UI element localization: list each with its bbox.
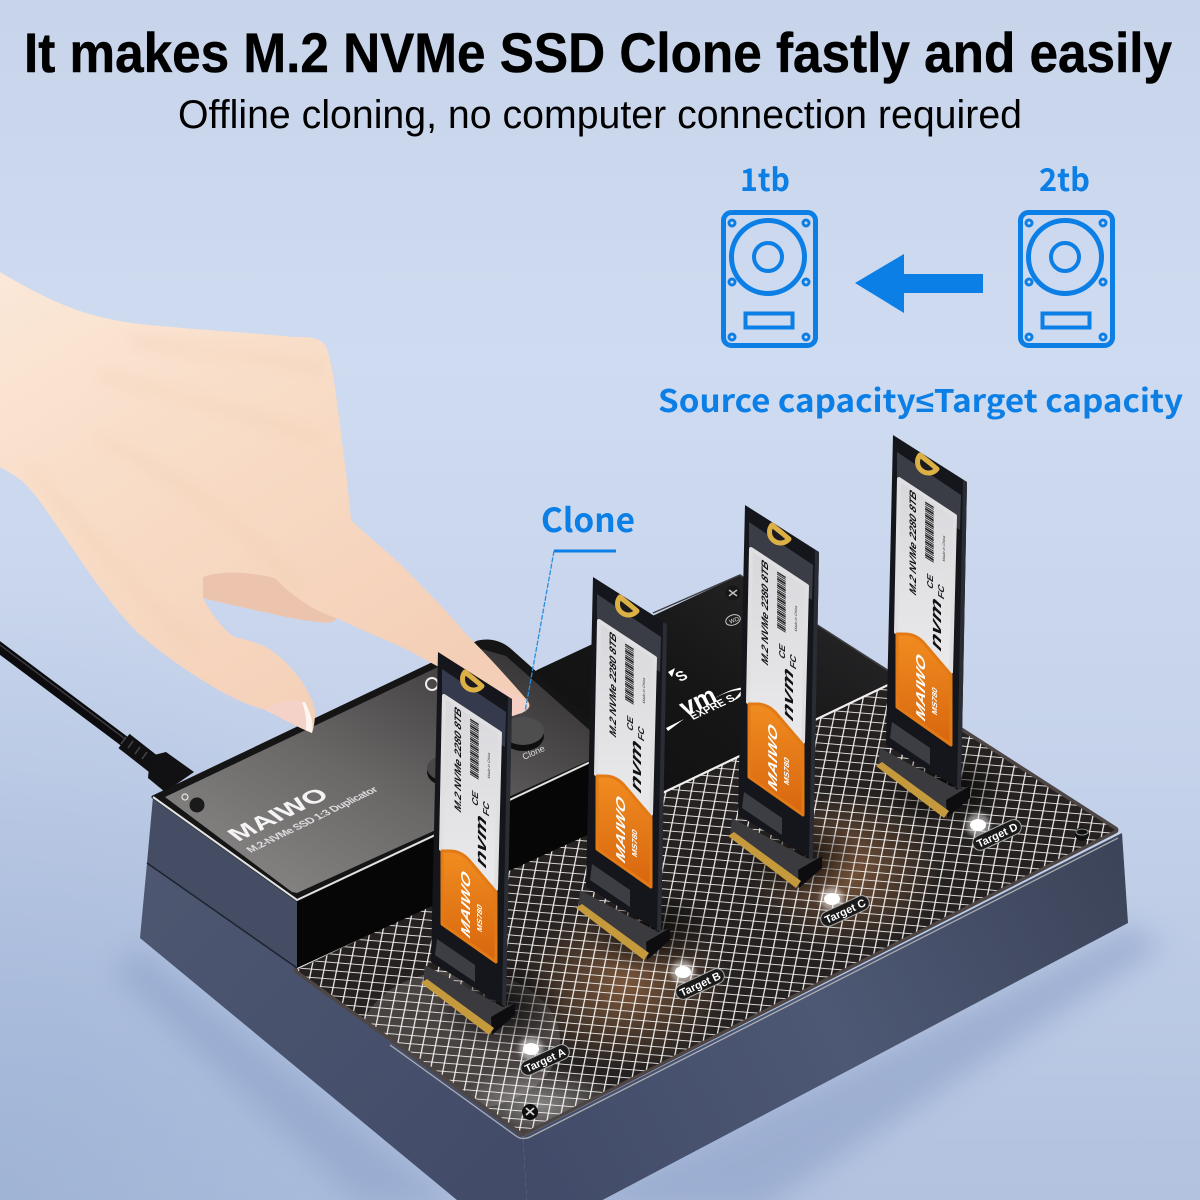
brand logo: MAIWO <box>222 784 335 846</box>
SSD card B: CE <box>626 714 636 734</box>
NVM Express logo on housing: vm <box>672 683 724 721</box>
clone label: Clone <box>541 494 635 542</box>
rear black housing <box>297 575 892 968</box>
SSD card D: M.2 NVMe 2280 8TB <box>908 488 919 598</box>
clone callout <box>525 494 635 712</box>
target B indicator: Target B <box>678 970 723 1000</box>
target C indicator <box>818 887 872 929</box>
SSD card C: nvm <box>779 664 796 724</box>
icon: source hard drive <box>1020 212 1112 346</box>
SSD card C: FC <box>789 652 799 672</box>
WD badge <box>724 613 742 627</box>
SSD card B: M.2 NVMe 2280 8TB <box>608 630 619 740</box>
housing top rim <box>153 641 620 900</box>
secondary button <box>427 755 467 786</box>
capacity diagram <box>658 155 1183 421</box>
SSD card D: CE <box>926 572 936 592</box>
clone button <box>502 717 544 751</box>
leader line <box>554 550 616 552</box>
SSD card C: CE <box>778 642 788 662</box>
NVM Express logo on housing: S <box>672 668 692 685</box>
SSD card D: FC <box>937 582 947 602</box>
SSD card C: MAIWO <box>766 721 780 794</box>
power LED <box>182 794 204 812</box>
SSD card D: MAIWO <box>914 651 928 724</box>
SSD card A <box>421 652 515 1035</box>
knuckle shading <box>30 340 325 650</box>
WD badge: WD <box>729 616 741 626</box>
model caption: M.2-NVMe SSD 1:3 Duplicator <box>244 785 382 855</box>
SSD card C: MS780 <box>782 755 791 787</box>
SSD card B: nvm <box>627 736 644 796</box>
SSD card A: nvm <box>472 811 489 871</box>
index finger nail <box>497 686 528 716</box>
curled finger underside <box>203 573 337 623</box>
target D indicator: Target D <box>975 821 1020 851</box>
SSD card C: M.2 NVMe 2280 8TB <box>760 558 771 668</box>
target drive label: 1tb <box>740 155 790 200</box>
SSD card B <box>576 577 670 960</box>
SSD card B: MAIWO <box>614 793 628 866</box>
base right face <box>523 833 1128 1200</box>
SSD card D: nvm <box>927 594 944 654</box>
screw: rear <box>726 586 740 600</box>
glossy top face <box>165 648 612 893</box>
hand <box>0 272 529 733</box>
SSD card B: Made in China <box>642 675 646 705</box>
finger nail <box>265 700 313 733</box>
SSD card C <box>728 505 822 888</box>
target A indicator: Target A <box>523 1046 568 1076</box>
SSD card A: MAIWO <box>459 868 473 941</box>
power cable <box>0 642 194 792</box>
base left face <box>140 863 527 1200</box>
subtitle: Offline cloning, no computer connection required <box>178 93 1022 137</box>
SSD card A: Made in China <box>487 750 491 780</box>
icon: target hard drive <box>724 212 816 346</box>
duplicator base <box>140 680 1128 1200</box>
left side of housing <box>147 797 297 968</box>
target B indicator <box>671 960 727 1002</box>
SSD card A: MS780 <box>475 902 484 934</box>
icon: arrow from source to target <box>855 254 983 313</box>
capacity rule text: Source capacity ≤Target capacity <box>658 376 1183 421</box>
SSD card C: Made in China <box>794 603 798 633</box>
NVM Express logo on housing <box>666 668 746 731</box>
grid plate <box>290 680 1120 1145</box>
target D indicator <box>966 813 1024 853</box>
SSD card D <box>876 435 970 818</box>
clone button caption: Clone <box>521 743 546 762</box>
plate bezel <box>297 684 1115 1133</box>
SSD card A: M.2 NVMe 2280 8TB <box>453 705 464 815</box>
front duplicator housing <box>147 641 620 968</box>
SSD card B: FC <box>637 724 647 744</box>
screw: right corner <box>1075 827 1089 841</box>
SSD card B: MS780 <box>630 827 639 859</box>
source drive label: 2tb <box>1039 155 1090 200</box>
SSD card D: Made in China <box>942 533 946 563</box>
SSD card A: FC <box>482 799 492 819</box>
NVM Express logo on housing: EXPRE S <box>687 693 738 722</box>
target A indicator <box>518 1037 572 1078</box>
SSD card A: CE <box>471 789 481 809</box>
power logo mark <box>426 678 438 690</box>
target C indicator: Target C <box>823 897 868 927</box>
screw: front corner <box>522 1104 538 1120</box>
SSD card D: MS780 <box>930 685 939 717</box>
front housing wall <box>297 748 620 968</box>
